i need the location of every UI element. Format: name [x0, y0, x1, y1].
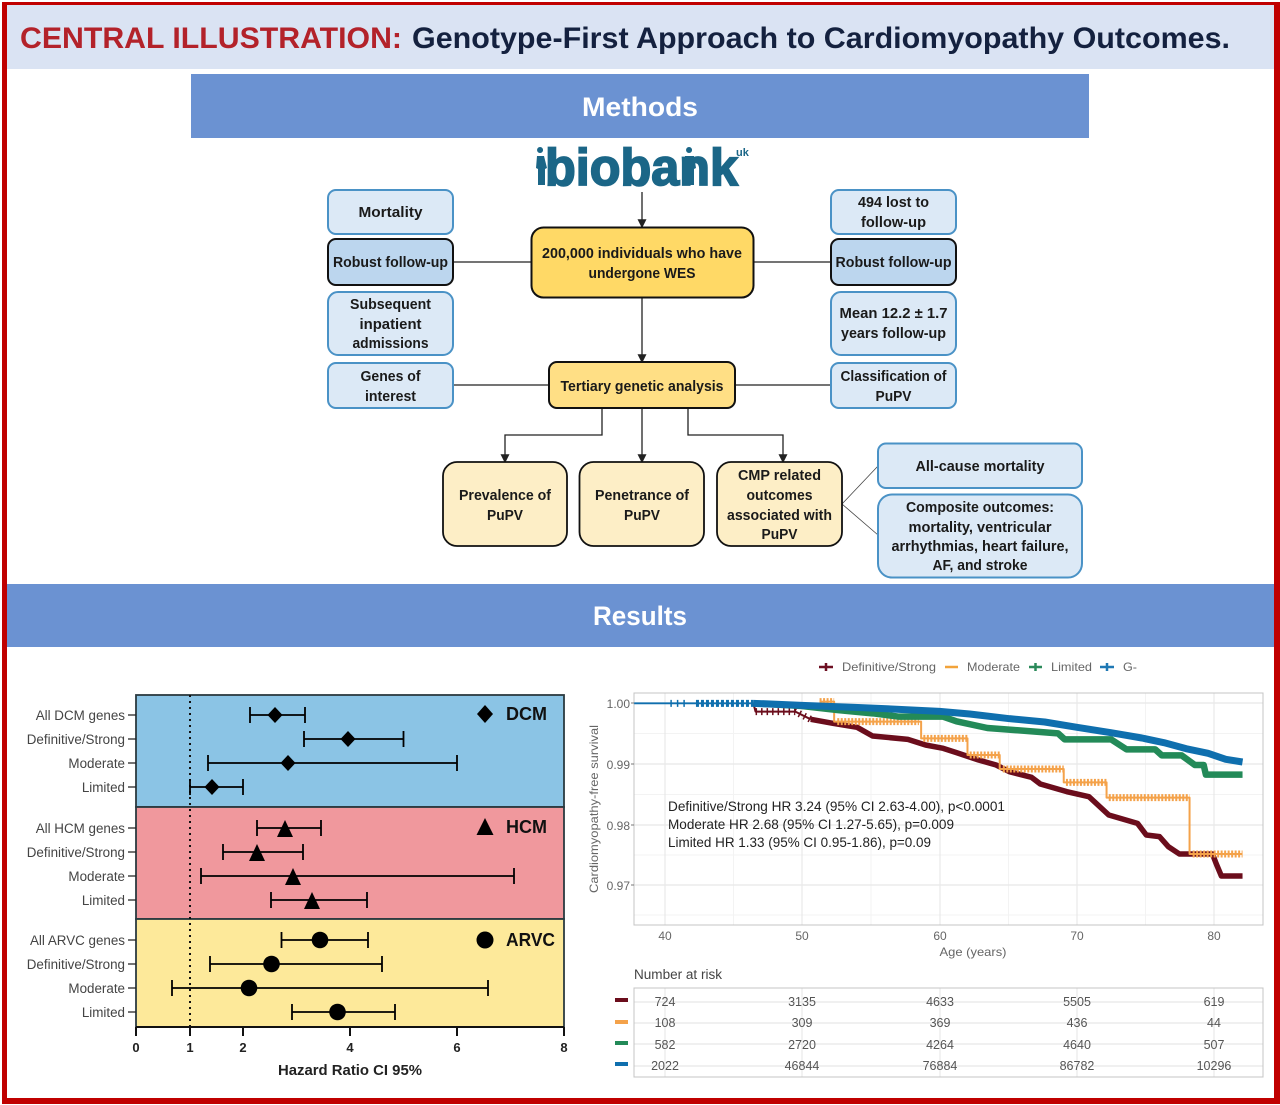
number at risk table: 10296 — [1197, 1059, 1231, 1073]
y axis labels: Definitive/Strong — [27, 957, 125, 972]
title: Genotype-First Approach to Cardiomyopathy Outcomes. — [412, 22, 1230, 55]
panel: ARVC — [136, 919, 564, 1027]
y axis title: Cardiomyopathy-free survival — [587, 725, 601, 893]
y axis labels: Limited — [82, 893, 125, 908]
box: Mean follow-up: years follow-up — [841, 326, 946, 342]
box: Composite outcomes: mortality, ventricular — [908, 520, 1052, 536]
y axis ticks — [607, 697, 634, 893]
box: CMP related outcomes: associated with — [727, 508, 832, 524]
x axis: 6 — [453, 1040, 461, 1055]
number at risk table: 582 — [655, 1038, 675, 1052]
hazard ratio annotation: Definitive/Strong HR 3.24 (95% CI 2.63-4.00), p<0.0001 — [668, 798, 1005, 814]
box: Mortality — [328, 190, 453, 234]
box: Tertiary genetic analysis: Tertiary genetic analysis — [560, 379, 724, 395]
title — [7, 5, 1274, 69]
box: CMP related outcomes — [717, 462, 842, 546]
y axis labels: All ARVC genes — [30, 933, 125, 948]
logo: UK Biobank: uk — [736, 147, 750, 159]
legend: DCM: DCM — [506, 704, 547, 724]
x axis: 0 — [132, 1040, 140, 1055]
box: CMP related outcomes: PuPV — [762, 527, 798, 543]
legend: ARVC: ARVC — [506, 930, 555, 950]
x axis ticks — [658, 929, 1221, 943]
box: CMP related outcomes: CMP related — [738, 468, 821, 484]
x axis ticks: 60 — [933, 929, 947, 943]
DCM intervals — [190, 707, 457, 795]
box: Subsequent inpatient admissions: inpatient — [360, 317, 422, 333]
x axis: 1 — [186, 1040, 194, 1055]
box: Genes of interest: Genes of — [360, 369, 421, 385]
hazard ratio annotation — [668, 798, 1005, 850]
chart legend: G- — [1123, 660, 1137, 674]
survival curves — [634, 702, 1243, 876]
number at risk table: 4264 — [926, 1038, 954, 1052]
legend: HCM — [476, 817, 547, 837]
legend: DCM — [477, 704, 547, 724]
box: Genes of interest: interest — [365, 389, 416, 405]
number at risk table: 369 — [930, 1016, 950, 1030]
y axis labels: All HCM genes — [36, 821, 125, 836]
y axis labels: Moderate — [68, 756, 125, 771]
box: Tertiary genetic analysis — [549, 362, 735, 408]
box: Composite outcomes: arrhythmias, heart failure, — [892, 539, 1068, 555]
title: CENTRAL ILLUSTRATION: — [20, 22, 402, 55]
number at risk table: 3135 — [788, 995, 816, 1009]
curve: definitive/strong — [753, 703, 1243, 876]
x axis: 4 — [346, 1040, 354, 1055]
y axis labels: Limited — [82, 1005, 125, 1020]
number at risk table: 2022 — [651, 1059, 679, 1073]
x axis: Hazard Ratio CI 95% — [278, 1063, 422, 1079]
box: Classification of PuPV — [831, 363, 956, 408]
box: Prevalence of PuPV: Prevalence of — [459, 488, 551, 504]
box: Robust follow-up (right) — [831, 239, 956, 285]
box: All-cause mortality: All-cause mortality — [916, 459, 1044, 475]
box: 494 lost to follow-up — [831, 190, 956, 234]
curve: moderate — [820, 702, 1243, 854]
box: Subsequent inpatient admissions — [328, 292, 453, 355]
box: Genes of interest — [328, 363, 453, 408]
y axis ticks: 1.00 — [607, 697, 630, 711]
number at risk table: 4633 — [926, 995, 954, 1009]
panel: HCM — [136, 807, 564, 919]
y axis ticks: 0.98 — [607, 819, 630, 833]
box: Subsequent inpatient admissions: Subsequent — [350, 297, 431, 313]
x axis — [132, 1027, 568, 1079]
number at risk table: 4640 — [1063, 1038, 1091, 1052]
survival chart — [587, 660, 1263, 1077]
y axis labels: All DCM genes — [36, 708, 125, 723]
box: 200,000 individuals: 200,000 individuals who have — [542, 246, 742, 262]
logo: UK Biobank: biobank — [545, 139, 738, 197]
hazard ratio annotation: Moderate HR 2.68 (95% CI 1.27-5.65), p=0.009 — [668, 816, 954, 832]
box: Penetrance of PuPV: PuPV — [624, 508, 660, 524]
y axis labels: Definitive/Strong — [27, 732, 125, 747]
box: Composite outcomes — [878, 494, 1082, 578]
number at risk table: 724 — [655, 995, 675, 1009]
box: Penetrance of PuPV: Penetrance of — [595, 488, 689, 504]
y axis ticks: 0.99 — [607, 758, 630, 772]
number at risk table: 5505 — [1063, 995, 1091, 1009]
number at risk table: 2720 — [788, 1038, 816, 1052]
x axis ticks: 50 — [795, 929, 809, 943]
box: Classification of PuPV: PuPV — [876, 389, 912, 405]
box: Composite outcomes: Composite outcomes: — [906, 500, 1054, 516]
number at risk table: 108 — [655, 1016, 675, 1030]
number at risk table — [615, 988, 1263, 1077]
box: Subsequent inpatient admissions: admissions — [352, 336, 428, 352]
chart legend: Limited — [1051, 660, 1092, 674]
x axis ticks: 40 — [658, 929, 672, 943]
number at risk table: 76884 — [923, 1059, 957, 1073]
number at risk table: 309 — [792, 1016, 812, 1030]
number at risk heading: Number at risk — [634, 967, 722, 982]
y axis labels: Moderate — [68, 869, 125, 884]
x axis: 8 — [560, 1040, 568, 1055]
number at risk table: 436 — [1067, 1016, 1087, 1030]
box: Prevalence of PuPV: PuPV — [487, 508, 523, 524]
forest plot — [27, 695, 568, 1079]
y axis labels: Limited — [82, 780, 125, 795]
box: 494 lost to follow-up: follow-up — [861, 215, 926, 231]
panel: DCM — [136, 695, 564, 807]
HCM intervals — [201, 820, 514, 909]
curve: limited — [753, 703, 1243, 775]
ARVC intervals — [172, 932, 488, 1020]
heading: Methods: Methods — [582, 92, 698, 122]
box: Robust follow-up (right): Robust follow-up — [836, 255, 952, 271]
y axis ticks: 0.97 — [607, 879, 630, 893]
number at risk table: 619 — [1204, 995, 1224, 1009]
number at risk table: 44 — [1207, 1016, 1221, 1030]
heading: Results — [7, 584, 1274, 647]
x axis title: Age (years) — [940, 945, 1006, 959]
y axis labels: Definitive/Strong — [27, 845, 125, 860]
box: 200,000 individuals — [532, 228, 754, 298]
x axis ticks: 70 — [1070, 929, 1084, 943]
box: Penetrance of PuPV — [580, 462, 704, 546]
box: All-cause mortality — [878, 444, 1082, 488]
heading: Methods — [191, 74, 1089, 138]
heading: Results: Results — [593, 601, 687, 631]
box: Robust follow-up (left): Robust follow-up — [333, 255, 448, 271]
flowchart connectors — [453, 192, 878, 535]
chart legend: Moderate — [967, 660, 1020, 674]
y axis labels — [27, 708, 136, 1020]
box: 494 lost to follow-up: 494 lost to — [858, 195, 929, 211]
x axis: 2 — [239, 1040, 247, 1055]
box: 200,000 individuals: undergone WES — [588, 266, 696, 282]
curve: G- — [634, 703, 1243, 762]
box: Classification of PuPV: Classification of — [840, 369, 947, 385]
box: Mean follow-up — [831, 292, 956, 355]
box: Prevalence of PuPV — [443, 462, 567, 546]
box: Mean follow-up: Mean 12.2 ± 1.7 — [840, 306, 948, 322]
legend: ARVC — [476, 930, 555, 950]
plot frame and grid — [634, 693, 1263, 925]
number at risk table: 46844 — [785, 1059, 819, 1073]
box: CMP related outcomes: outcomes — [746, 488, 812, 504]
number at risk table: 86782 — [1060, 1059, 1094, 1073]
box: Mortality: Mortality — [358, 205, 422, 221]
number at risk table: 507 — [1204, 1038, 1224, 1052]
hazard ratio annotation: Limited HR 1.33 (95% CI 0.95-1.86), p=0.09 — [668, 834, 931, 850]
y axis labels: Moderate — [68, 981, 125, 996]
box: Robust follow-up (left) — [328, 239, 453, 285]
box: Composite outcomes: AF, and stroke — [932, 558, 1028, 574]
legend: HCM: HCM — [506, 817, 547, 837]
chart legend — [819, 660, 1137, 674]
chart legend: Definitive/Strong — [842, 660, 936, 674]
x axis ticks: 80 — [1207, 929, 1221, 943]
